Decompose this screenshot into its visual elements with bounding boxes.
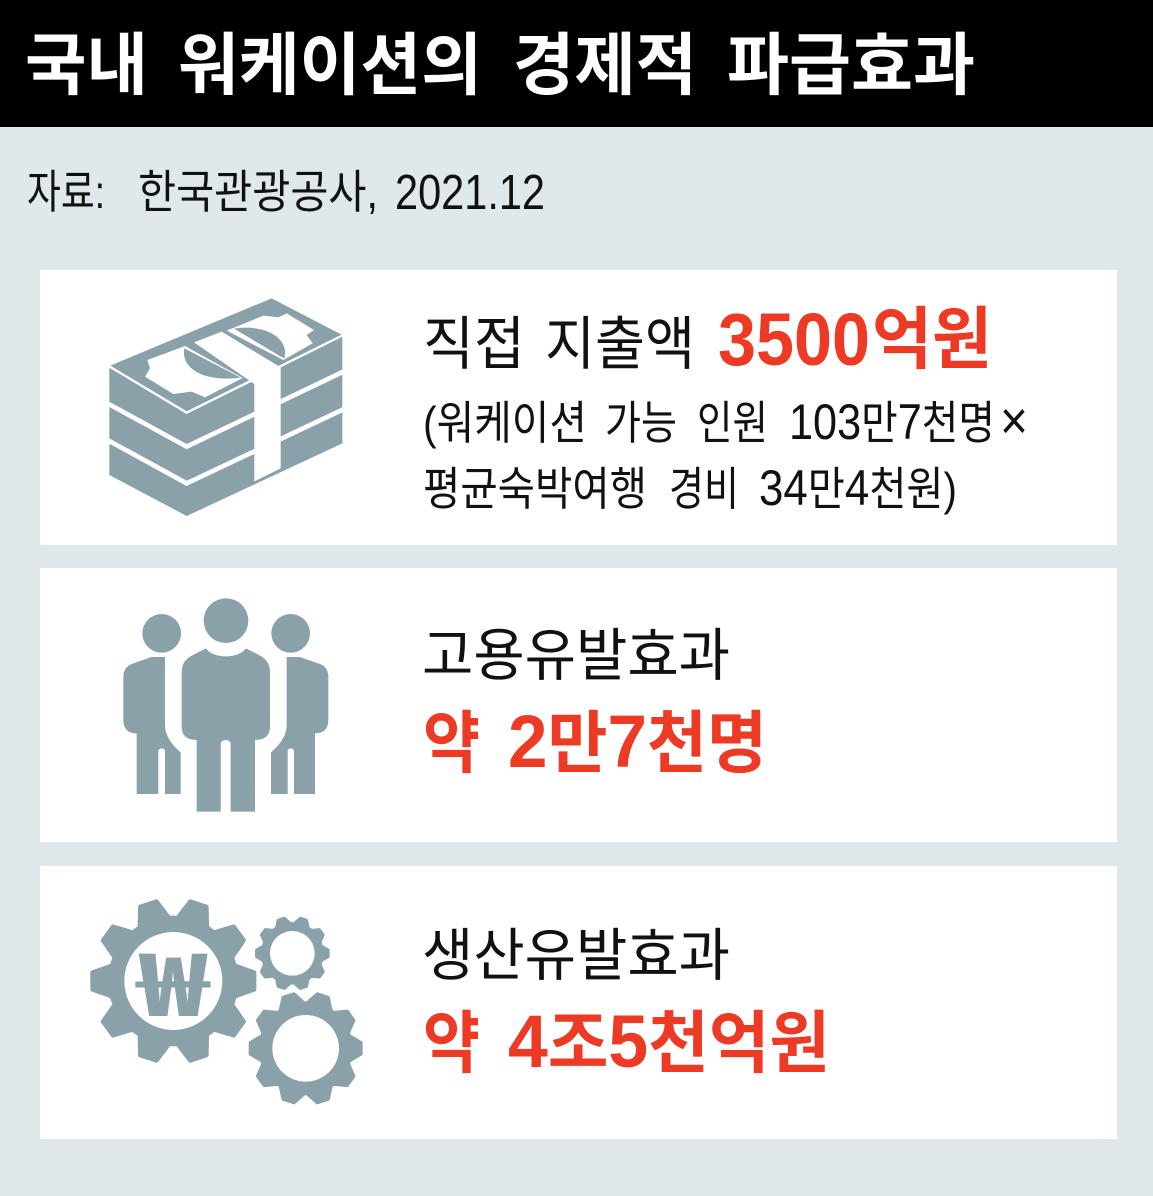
small gear [256, 917, 328, 990]
heading: direct spending: 직접 [423, 312, 525, 377]
title bar [0, 0, 1153, 127]
heading: direct spending [423, 312, 695, 377]
value: 약 2만7천명: 2만7천명 [508, 700, 767, 783]
large gear [92, 899, 254, 1063]
right banknote [227, 313, 314, 360]
formula line 1: 103만7천명 [789, 394, 995, 450]
formula line 2: 34만4천원) [759, 460, 957, 516]
icon: three people [123, 598, 328, 812]
source note: 자료: [27, 166, 105, 218]
value: 3500억원: 억원 [872, 302, 992, 378]
value: 약 4조5천억원: 약 [423, 1006, 480, 1082]
value: 3500억원 [718, 298, 992, 381]
panel: employment effect [40, 568, 1117, 842]
value: 약 2만7천명: 약 [423, 706, 480, 782]
formula line 1: 인원 [697, 397, 768, 449]
heading: production effect: 생산유발효과 [422, 924, 730, 988]
formula line 2 [423, 460, 957, 516]
source note [27, 166, 545, 220]
panel: direct spending [40, 270, 1117, 545]
formula line 1: 가능 [605, 397, 677, 449]
icon: stack of money [109, 298, 343, 516]
value: 약 4조5천억원: 4조5천억원 [508, 1000, 830, 1083]
title: 경제적 [513, 28, 697, 104]
source note: 한국관광공사, [138, 166, 378, 218]
panel: production effect [40, 866, 1117, 1139]
title: 국내 [25, 28, 148, 104]
heading: employment effect: 고용유발효과 [422, 624, 730, 688]
won sign: ₩ [136, 918, 210, 1041]
left banknote [145, 346, 243, 397]
source note: 2021.12 [395, 166, 545, 220]
title: 파급효과 [727, 28, 975, 104]
formula line 1 [423, 391, 1028, 451]
formula line 2: 경비 [669, 463, 739, 515]
heading: direct spending: 지출액 [545, 312, 695, 377]
medium gear [250, 992, 361, 1105]
formula line 2: 평균숙박여행 [423, 463, 647, 515]
value: 3500억원: 3500 [718, 298, 870, 381]
formula line 1: (워케이션 [423, 397, 587, 449]
title [25, 28, 975, 104]
icon: gears with won sign [92, 899, 361, 1105]
title: 워케이션의 [178, 28, 482, 104]
formula line 1: × [1000, 391, 1028, 451]
paper band [194, 332, 281, 481]
